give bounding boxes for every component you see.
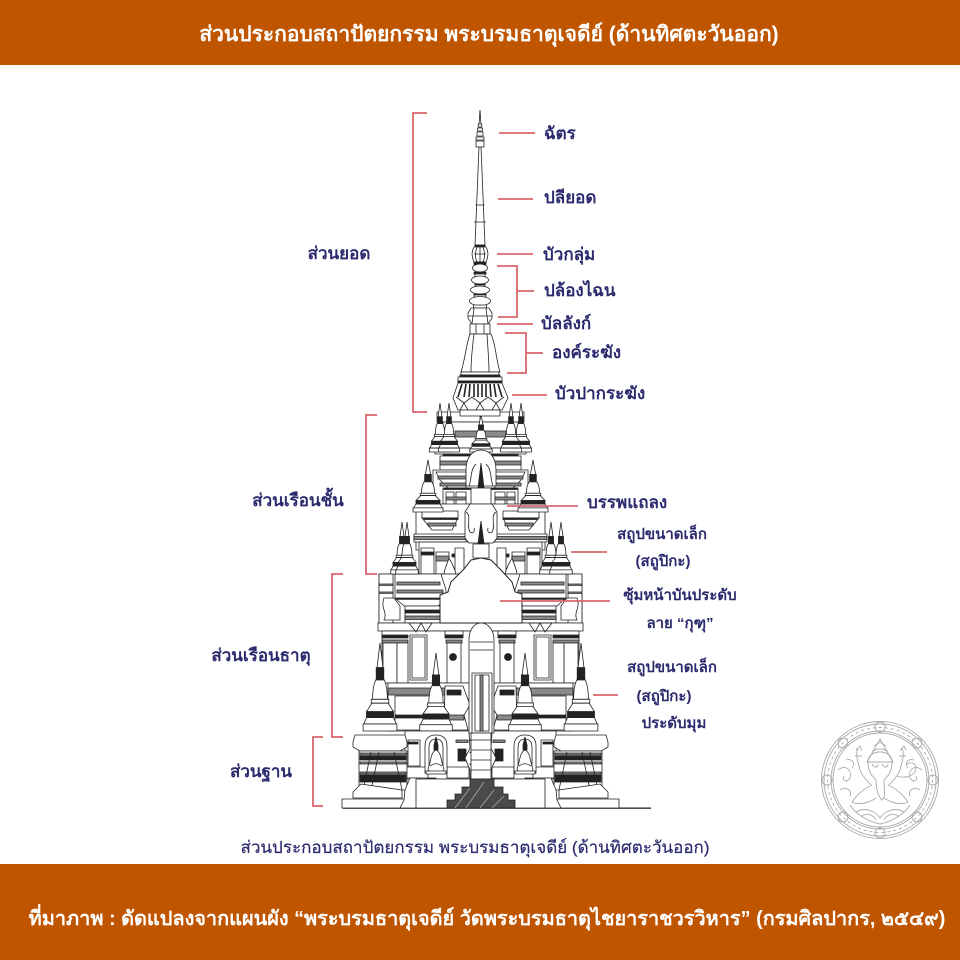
part labels: บัวปากระฆัง — [555, 384, 645, 403]
part labels: ปลียอด — [544, 187, 596, 207]
part labels: ปล้องไฉน — [544, 280, 616, 300]
header banner — [0, 0, 960, 65]
part labels: (สถูปิกะ) — [637, 687, 691, 706]
central stairs — [447, 733, 515, 808]
part labels: สถูปขนาดเล็ก — [617, 524, 707, 544]
central gables — [440, 450, 522, 623]
brackets and leader lines — [313, 113, 618, 806]
footer banner: ที่มาภาพ : ดัดแปลงจากแผนผัง “พระบรมธาตุเจดีย์ วัดพระบรมธาตุไชยาราชวรวิหาร” (กรมศิลปากร, ๒๕๔๙) — [29, 908, 945, 930]
caption: ส่วนประกอบสถาปัตยกรรม พระบรมธาตุเจดีย์ (ด้านทิศตะวันออก) — [240, 838, 710, 858]
part labels: องค์ระฆัง — [552, 342, 621, 362]
section labels: ส่วนยอด — [308, 244, 370, 263]
part labels — [541, 124, 737, 733]
part labels: บรรพแถลง — [587, 493, 667, 512]
part labels: (สถูปิกะ) — [636, 552, 690, 571]
part labels: ฉัตร — [544, 124, 577, 143]
seal emblem: Ganesha — [822, 722, 938, 838]
central door — [469, 623, 494, 733]
section labels: ส่วนเรือนชั้น — [252, 487, 344, 510]
section labels — [211, 244, 370, 783]
spire and finial — [453, 110, 508, 416]
section labels: ส่วนฐาน — [230, 762, 292, 783]
small stupas upper tier — [391, 403, 572, 574]
footer banner — [0, 864, 960, 960]
section labels: ส่วนเรือนธาตุ — [211, 645, 311, 666]
stupa elevation drawing — [342, 110, 619, 808]
header banner: ส่วนประกอบสถาปัตยกรรม พระบรมธาตุเจดีย์ (ด้านทิศตะวันออก) — [199, 23, 779, 46]
ground line — [343, 808, 651, 809]
part labels: บัลลังก์ — [541, 313, 591, 333]
part labels: ประดับมุม — [642, 715, 706, 733]
part labels: สถูปขนาดเล็ก — [627, 657, 717, 677]
part labels: บัวกลุ่ม — [543, 245, 595, 265]
part labels: ลาย “กุฑุ” — [646, 615, 714, 633]
part labels: ซุ้มหน้าบันประดับ — [623, 587, 737, 605]
